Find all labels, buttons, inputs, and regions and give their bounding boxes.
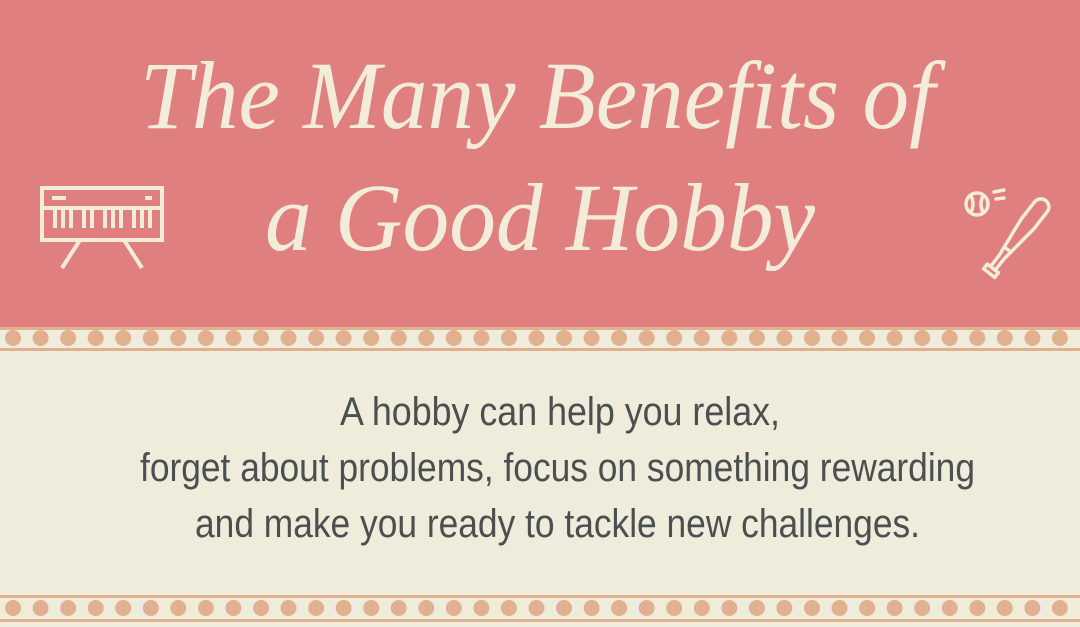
title: a Good Hobby xyxy=(265,164,815,271)
icon: baseball bat and ball xyxy=(966,190,1052,278)
dotted border bottom xyxy=(0,595,1080,622)
body text: forget about problems, focus on something rewarding xyxy=(140,446,975,490)
dotted border top xyxy=(0,330,1080,351)
header band xyxy=(0,0,1080,330)
icon: keyboard xyxy=(42,188,162,268)
title xyxy=(140,42,946,271)
body text: A hobby can help you relax, xyxy=(340,390,780,434)
title: The Many Benefits of xyxy=(140,42,946,149)
body text xyxy=(140,390,975,546)
body text: and make you ready to tackle new challenges. xyxy=(195,502,920,546)
